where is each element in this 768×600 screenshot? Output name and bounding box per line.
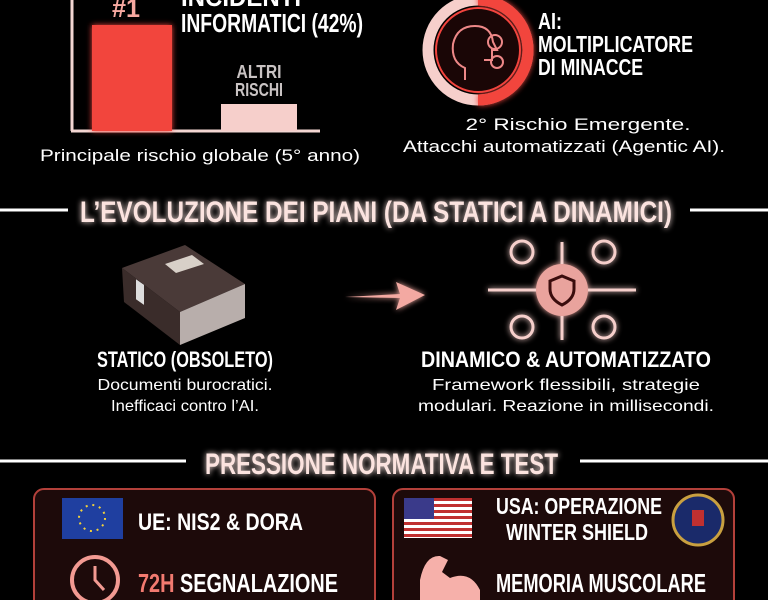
- label: statico: Inefficaci contro l’AI.: [111, 398, 259, 415]
- arrow: [345, 282, 425, 310]
- icon: dynamic gears: [488, 241, 636, 340]
- label: dinamico: modulari. Reazione in millisecondi.: [418, 398, 714, 415]
- caption: AI: [403, 115, 725, 156]
- heading: AI: DI MINACCE: [538, 54, 643, 80]
- heading: AI: AI:: [538, 8, 562, 34]
- label: dinamico: DINAMICO & AUTOMATIZZATO: [421, 347, 711, 372]
- icon: FBI seal: [673, 495, 723, 545]
- label: statico: Documenti burocratici.: [98, 377, 272, 394]
- panel: USA: [393, 489, 734, 600]
- heading: AI: MOLTIPLICATORE: [538, 31, 693, 57]
- panel: UE: 72H SEGNALAZIONE: [138, 568, 338, 598]
- label: dinamico: [418, 347, 714, 415]
- icon: EU flag: [62, 498, 123, 539]
- section title: pressione: PRESSIONE NORMATIVA E TEST: [205, 448, 558, 481]
- icon: binder: [122, 245, 245, 345]
- icon: muscle: [420, 556, 480, 600]
- caption: bar chart: Principale rischio globale (5° anno): [40, 146, 360, 165]
- label: statico: STATICO (OBSOLETO): [97, 347, 273, 372]
- icon: clock: [72, 557, 118, 600]
- label: statico: [97, 347, 273, 415]
- bar chart: INFORMATICI (42%): [181, 8, 363, 38]
- panel: USA: WINTER SHIELD: [506, 519, 648, 545]
- panel: UE: [34, 489, 375, 600]
- caption: AI: Attacchi automatizzati (Agentic AI).: [403, 137, 725, 156]
- bar chart: RISCHI: [235, 80, 283, 100]
- heading: AI: [538, 8, 693, 80]
- panel: UE: UE: NIS2 & DORA: [138, 509, 303, 536]
- icon: US flag: [404, 498, 472, 538]
- icon: AI ring: [428, 0, 528, 100]
- panel: USA: USA: OPERAZIONE: [496, 493, 662, 519]
- caption: AI: 2° Rischio Emergente.: [466, 115, 690, 134]
- bar chart: ALTRI: [236, 62, 282, 82]
- label: dinamico: Framework flessibili, strategie: [432, 377, 700, 394]
- bar chart: [71, 0, 363, 131]
